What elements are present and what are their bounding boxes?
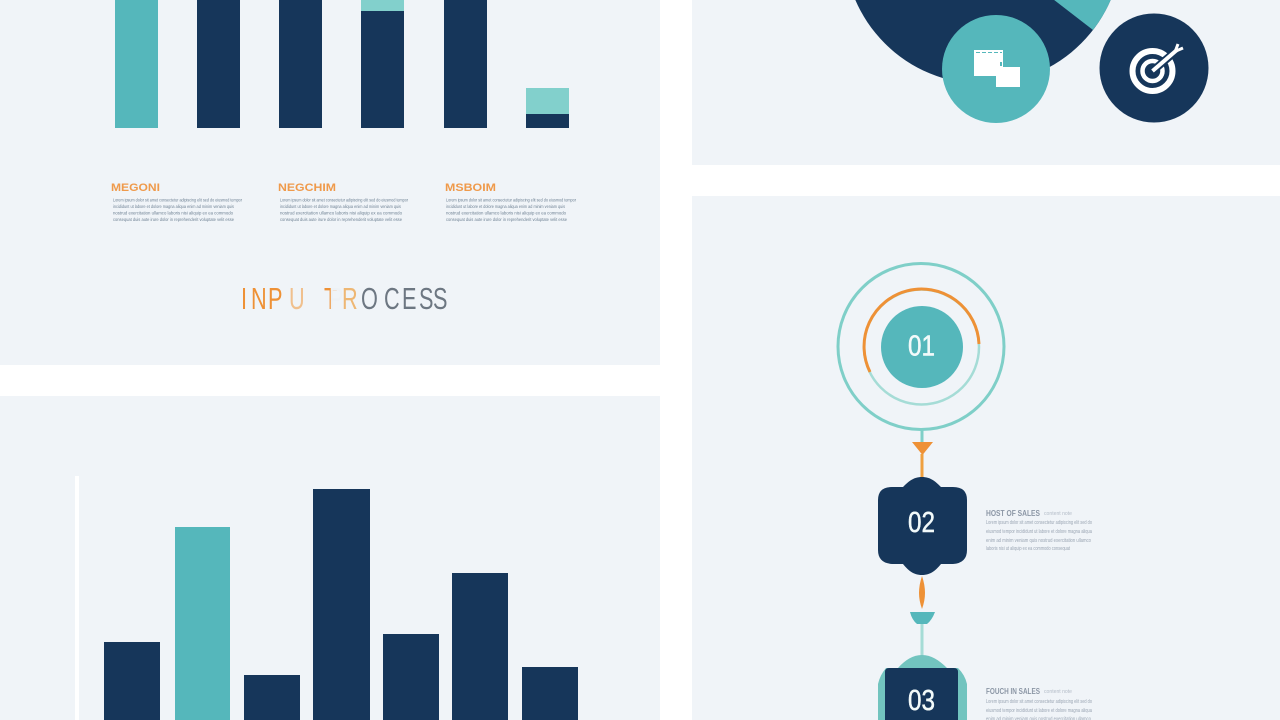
text block: note two: NEGCHIM [278, 182, 336, 194]
step 01 badge: 01 [908, 330, 935, 362]
title: T [324, 281, 337, 316]
text block: step 03 [986, 687, 1093, 720]
step 02 badge [878, 477, 967, 575]
title: P [329, 281, 343, 316]
title: U [289, 281, 305, 316]
text block: note one: consequat duis aute irure dolor in reprehenderit voluptate velit esse [113, 217, 234, 222]
title: C [384, 281, 400, 316]
arrow: step 01 to 02 [912, 430, 933, 478]
text block: step 03: Lorem ipsum dolor sit amet consectetur adipiscing elit sed do [986, 699, 1092, 705]
text block: step 03: eiusmod tempor incididunt ut labore et dolore magna aliqua [986, 708, 1093, 714]
arrow: step 02 to 03 [910, 576, 935, 656]
title: E [402, 281, 416, 316]
panel: top-left bar chart and notes [0, 0, 660, 365]
text block: step 02: HOST OF SALES [986, 509, 1041, 518]
text block: note three: consequat duis aute irure dolor in reprehenderit voluptate velit esse [446, 217, 567, 222]
panel: top-right pie and icons [692, 0, 1280, 165]
title: O [361, 281, 378, 316]
text block: note one [111, 182, 242, 222]
text block: note one: incididunt ut labore et dolore magna aliqua enim ad minim veniam quis [113, 204, 235, 209]
text block: note three: MSBOIM [445, 182, 496, 194]
text block: note two: nostrud exercitation ullamco laboris nisi aliquip ex ea commodo [280, 210, 402, 216]
title: I [241, 281, 247, 316]
text block: note three: nostrud exercitation ullamco laboris nisi aliquip ex ea commodo [446, 210, 566, 216]
text block: note one: MEGONI [111, 182, 160, 194]
text block: note two: consequat duis aute irure dolor in reprehenderit voluptate velit esse [280, 217, 402, 222]
text block: note three: Lorem ipsum dolor sit amet consectetur adipiscing elit sed do eiusmod tempor [446, 198, 576, 202]
text block: note one: nostrud exercitation ullamco laboris nisi aliquip ex ea commodo [113, 210, 233, 216]
step 03 badge [878, 655, 967, 720]
axis line [75, 476, 79, 720]
text block: step 02: enim ad minim veniam quis nostrud exercitation ullamco [986, 538, 1091, 544]
text block: note two [278, 182, 408, 222]
text block: step 02 [986, 509, 1093, 552]
title: N [251, 281, 267, 316]
step 01 badge [838, 264, 1004, 430]
title: S [433, 281, 447, 316]
text block: step 02: laboris nisi ut aliquip ex ea commodo consequat [986, 546, 1070, 552]
text block: note three: incididunt ut labore et dolore magna aliqua enim ad minim veniam quis [446, 204, 566, 209]
text block: step 02: Lorem ipsum dolor sit amet consectetur adipiscing elit sed do [986, 520, 1092, 526]
step 03 badge: 03 [908, 685, 935, 717]
bar chart: bottom [104, 489, 578, 720]
title: S [419, 281, 433, 316]
text block: note three [445, 182, 576, 222]
text block: step 03: content note [1044, 689, 1072, 695]
title: R [342, 281, 358, 316]
text block: step 03: FOUCH IN SALES [986, 687, 1041, 696]
icon: overlapping windows [942, 15, 1050, 123]
pie chart [844, 0, 1122, 84]
text block: note two: Lorem ipsum dolor sit amet consectetur adipiscing elit sed do eiusmod tempor [280, 198, 408, 202]
panel: bottom-right numbered process [692, 196, 1280, 720]
text block: step 02: eiusmod tempor incididunt ut labore et dolore magna aliqua [986, 529, 1093, 535]
text block: note one: Lorem ipsum dolor sit amet consectetur adipiscing elit sed do eiusmod tempor [113, 198, 242, 202]
panel: bottom-left bar chart [0, 396, 660, 720]
step 02 badge: 02 [908, 507, 935, 539]
text block: step 02: content note [1044, 511, 1072, 517]
bar chart: top [115, 0, 569, 128]
icon: target with arrow [1100, 14, 1208, 122]
title: P [268, 281, 283, 316]
text block: note two: incididunt ut labore et dolore magna aliqua enim ad minim veniam quis [280, 204, 402, 209]
